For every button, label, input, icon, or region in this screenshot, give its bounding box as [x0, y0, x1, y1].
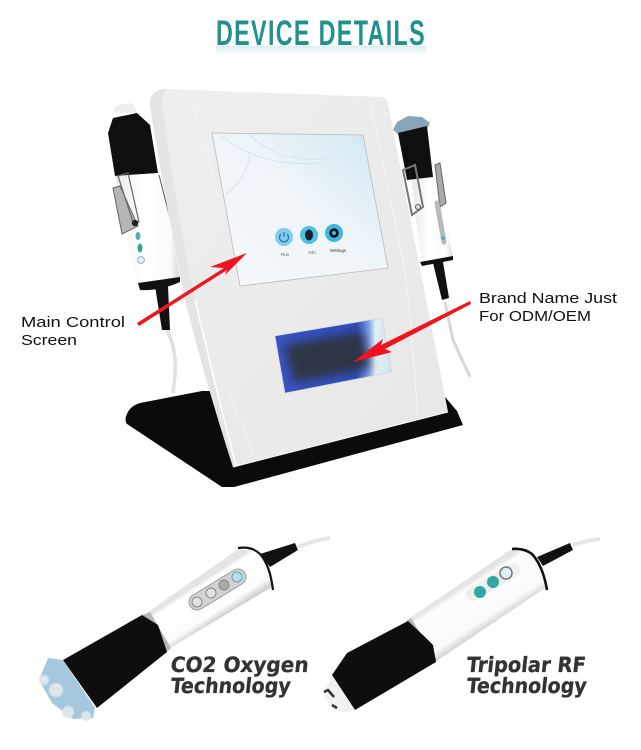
logo window — [275, 318, 392, 393]
label: CO2 oxygen technology: CO2 Oxygen — [169, 652, 310, 677]
button strip — [473, 567, 513, 598]
device panel — [150, 89, 448, 467]
label: brand name: Brand Name Just — [479, 290, 618, 307]
touch screen: Settings — [330, 248, 347, 253]
label: brand name — [479, 290, 618, 325]
touch screen: Run — [281, 252, 290, 257]
title: DEVICE DETAILS — [216, 14, 426, 53]
settings icon — [325, 224, 343, 242]
label: CO2 oxygen technology: Technology — [169, 673, 292, 698]
main device — [108, 89, 470, 487]
touch screen — [212, 133, 388, 286]
label: main control screen: Screen — [21, 332, 77, 349]
label: tripolar RF technology: Technology — [465, 673, 588, 698]
control panel — [192, 572, 242, 607]
info icon — [300, 226, 318, 244]
label: main control screen — [21, 314, 125, 349]
arrow: main control screen — [137, 253, 247, 326]
label: main control screen: Main Control — [21, 314, 125, 331]
right handpiece — [393, 116, 470, 377]
base stand — [126, 391, 463, 487]
label: tripolar RF technology — [465, 652, 588, 698]
touch screen: Info — [308, 250, 316, 255]
tripolar RF handpiece — [323, 539, 600, 713]
CO2 oxygen handpiece — [39, 538, 330, 721]
left handpiece — [108, 103, 180, 393]
power icon — [275, 228, 293, 246]
label: tripolar RF technology: Tripolar RF — [465, 652, 587, 677]
label: brand name: For ODM/OEM — [479, 308, 591, 325]
label: CO2 oxygen technology — [169, 652, 310, 698]
arrow: brand name — [353, 301, 471, 362]
title — [216, 14, 426, 56]
